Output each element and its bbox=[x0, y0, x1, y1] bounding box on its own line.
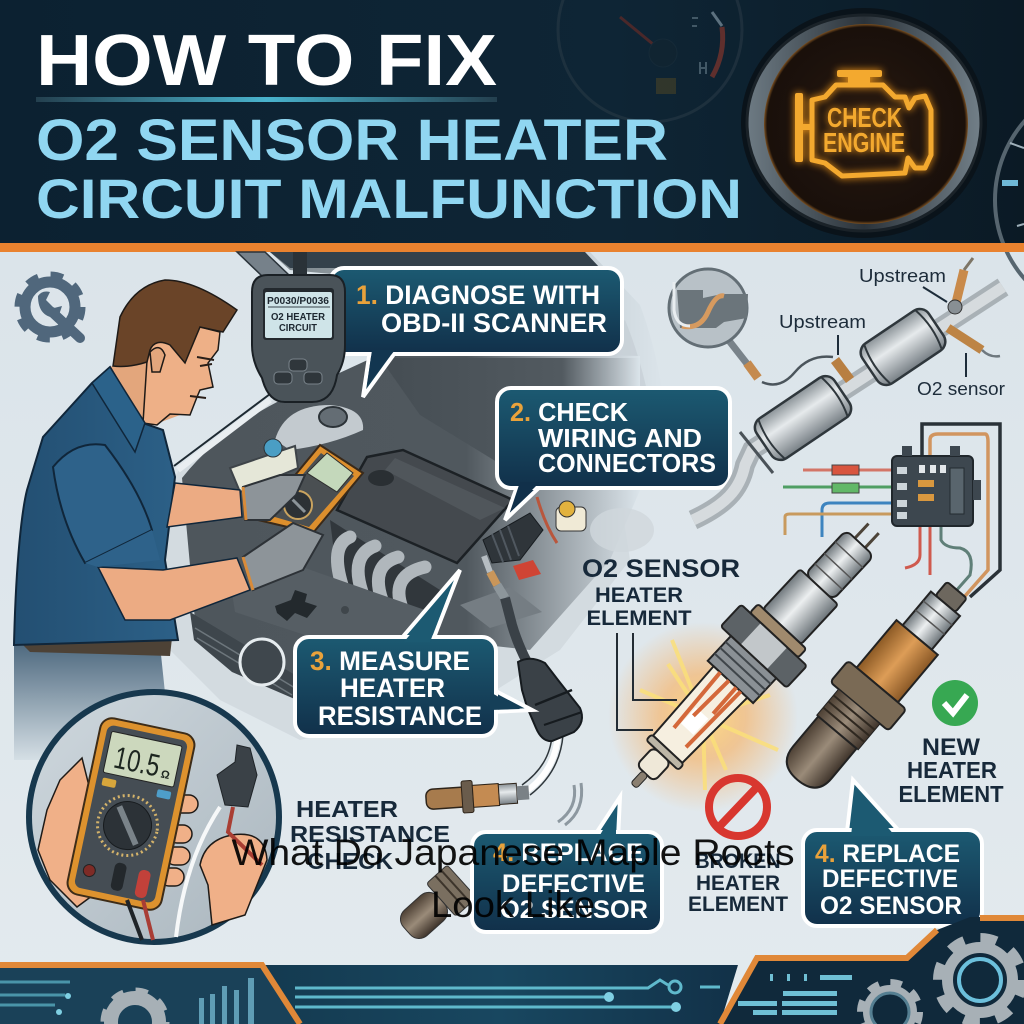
shirt bbox=[14, 367, 178, 645]
red probe bbox=[228, 807, 262, 865]
orange divider bbox=[0, 243, 1024, 252]
manifold bbox=[330, 520, 440, 625]
fuse red bbox=[832, 465, 859, 475]
bay interior bbox=[182, 352, 640, 680]
gloves bbox=[243, 475, 305, 520]
OBD-II scanner bbox=[252, 252, 345, 402]
leads bbox=[127, 900, 142, 940]
panel background bbox=[0, 250, 1024, 1024]
upstream leaders bbox=[838, 287, 966, 377]
new heater element label: NEW bbox=[922, 734, 980, 761]
reservoir bbox=[230, 446, 298, 492]
fingers bbox=[160, 795, 198, 886]
title: CIRCUIT MALFUNCTION bbox=[36, 167, 742, 230]
grille bbox=[190, 612, 300, 700]
callout 2: WIRING AND bbox=[538, 423, 702, 453]
callout 1: OBD-II SCANNER bbox=[381, 308, 607, 338]
right strut bbox=[590, 508, 654, 552]
wire and sensor bbox=[762, 357, 833, 384]
heater labels bbox=[582, 555, 740, 630]
forearm lower bbox=[98, 558, 250, 620]
exhaust labels: O2 sensor bbox=[917, 379, 1005, 399]
heater labels: O2 SENSOR bbox=[582, 555, 740, 583]
meter body bbox=[65, 716, 197, 912]
exhaust system bbox=[669, 258, 1003, 520]
catalytic converter 1 bbox=[751, 372, 855, 464]
icon: prohibition bbox=[709, 778, 767, 836]
mechanic bbox=[14, 280, 250, 760]
callout 3 bbox=[295, 570, 532, 736]
small sensor lower bbox=[392, 865, 477, 947]
handheld multimeter bbox=[243, 445, 363, 590]
headlight bbox=[240, 639, 284, 685]
broken heater element label: HEATER bbox=[696, 872, 780, 895]
overlay caption: Look Like bbox=[431, 884, 595, 925]
exhaust labels bbox=[779, 266, 1005, 399]
heater resistance check label bbox=[290, 796, 450, 874]
footer bbox=[0, 917, 1024, 1024]
dashboard gauge bbox=[558, 0, 742, 122]
hood rim bbox=[178, 400, 270, 470]
callout 3: 3. MEASURE bbox=[310, 646, 470, 676]
callout 4 right: O2 SENSOR bbox=[820, 892, 962, 920]
hood strut bbox=[237, 252, 290, 276]
icon: gear and wrench bbox=[19, 276, 81, 338]
callout 4 left: DEFECTIVE bbox=[502, 870, 645, 898]
sensor neck bbox=[484, 556, 490, 572]
collar bbox=[92, 367, 145, 452]
callout 1 bbox=[330, 268, 622, 397]
inset detail bbox=[669, 269, 748, 347]
callout 2 bbox=[497, 388, 730, 520]
overlay caption bbox=[232, 832, 795, 925]
bar chart bbox=[199, 978, 254, 1024]
pants bbox=[14, 645, 172, 760]
forearm upper bbox=[167, 483, 242, 527]
fuse box wiring bbox=[783, 424, 1000, 597]
callout 4 left bbox=[472, 797, 662, 932]
scanner screen text: O2 HEATER bbox=[271, 312, 326, 323]
meter body: 10.5 bbox=[111, 740, 163, 784]
callout 3: HEATER bbox=[340, 673, 445, 703]
broken heater element label: ELEMENT bbox=[688, 893, 788, 916]
car body bbox=[160, 345, 630, 740]
check engine lamp bbox=[741, 8, 987, 238]
fuse green bbox=[832, 483, 859, 493]
lower sensor wires bbox=[558, 783, 582, 825]
exhaust pipes bbox=[693, 287, 1003, 520]
small sensor bbox=[425, 776, 530, 816]
heater element sensor cutaway bbox=[601, 498, 907, 816]
callout 2: 2. CHECK bbox=[510, 397, 628, 427]
tray bbox=[230, 568, 425, 640]
connector bbox=[217, 745, 257, 807]
heater labels: ELEMENT bbox=[586, 607, 692, 630]
catalytic converter 2 bbox=[856, 305, 950, 389]
leaders to heater element bbox=[617, 633, 677, 730]
sensor lower right bbox=[948, 328, 982, 350]
sleeve over forearm bbox=[85, 530, 160, 567]
new heater element label bbox=[898, 734, 1004, 807]
belt bbox=[18, 638, 172, 656]
title bbox=[36, 21, 742, 230]
callout 4 left: O2 SENSOR bbox=[500, 896, 648, 924]
right gauge edge bbox=[995, 80, 1024, 320]
white wire bbox=[176, 807, 220, 937]
new heater element label: HEATER bbox=[907, 757, 997, 783]
fuse box bbox=[892, 456, 973, 526]
ear bbox=[150, 348, 165, 372]
brow and eye bbox=[190, 357, 214, 398]
check engine text bbox=[823, 102, 905, 158]
hair bbox=[113, 280, 237, 366]
heater resistance check label: RESISTANCE bbox=[290, 821, 450, 847]
hand left bbox=[38, 758, 100, 907]
hand right bbox=[200, 834, 267, 925]
callout 4 right: DEFECTIVE bbox=[822, 865, 958, 893]
car engine bay bbox=[160, 252, 662, 740]
neck bbox=[108, 345, 180, 428]
strut tower bbox=[275, 405, 363, 450]
broken heater element label: BROKEN bbox=[696, 850, 780, 873]
callout 4 left: 4. REPLACE bbox=[493, 839, 643, 867]
scanner screen text: CIRCUIT bbox=[279, 323, 317, 334]
header panel bbox=[0, 0, 1024, 320]
icon: green check bbox=[932, 680, 978, 726]
overlay caption: What Do Japanese Maple Roots bbox=[232, 832, 795, 873]
red and yellow details bbox=[556, 507, 586, 531]
new sensor bbox=[768, 566, 986, 804]
connector body bbox=[518, 659, 582, 741]
exhaust labels: Upstream bbox=[779, 312, 866, 332]
exhaust labels: Upstream bbox=[859, 266, 946, 286]
heater resistance check label: CHECK bbox=[307, 848, 393, 874]
check engine text: ENGINE bbox=[823, 127, 905, 158]
sleeve bbox=[53, 444, 152, 563]
ribbed boot bbox=[483, 513, 543, 563]
new heater element label: ELEMENT bbox=[898, 781, 1004, 807]
circuit lines bbox=[0, 980, 720, 1007]
callout 1: 1. DIAGNOSE WITH bbox=[356, 280, 600, 310]
callout 3: RESISTANCE bbox=[318, 701, 482, 731]
callout 2: CONNECTORS bbox=[538, 448, 716, 478]
engine cover bbox=[337, 450, 513, 563]
heater labels: HEATER bbox=[595, 584, 683, 607]
scanner screen text: P0030/P0036 bbox=[267, 296, 329, 307]
heater resistance check label: HEATER bbox=[296, 796, 398, 822]
callout 4 right: 4. REPLACE bbox=[815, 840, 960, 868]
sensor upstream top bbox=[955, 270, 964, 307]
broken heater element label bbox=[688, 850, 788, 916]
status dashes bbox=[738, 974, 852, 1015]
cable and connector bbox=[483, 513, 582, 795]
icon: engine outline bbox=[795, 70, 931, 176]
meter body: Ω bbox=[160, 768, 171, 782]
callout 4 right bbox=[803, 780, 982, 926]
title: HOW TO FIX bbox=[36, 21, 497, 101]
multimeter inset bbox=[29, 692, 279, 942]
gears bbox=[104, 938, 1022, 1024]
title: O2 SENSOR HEATER bbox=[36, 108, 668, 173]
check engine text: CHECK bbox=[827, 102, 902, 133]
scanner screen text bbox=[267, 296, 329, 334]
dark upper bay bbox=[380, 358, 640, 470]
face bbox=[143, 327, 220, 425]
clamp bbox=[740, 432, 773, 473]
